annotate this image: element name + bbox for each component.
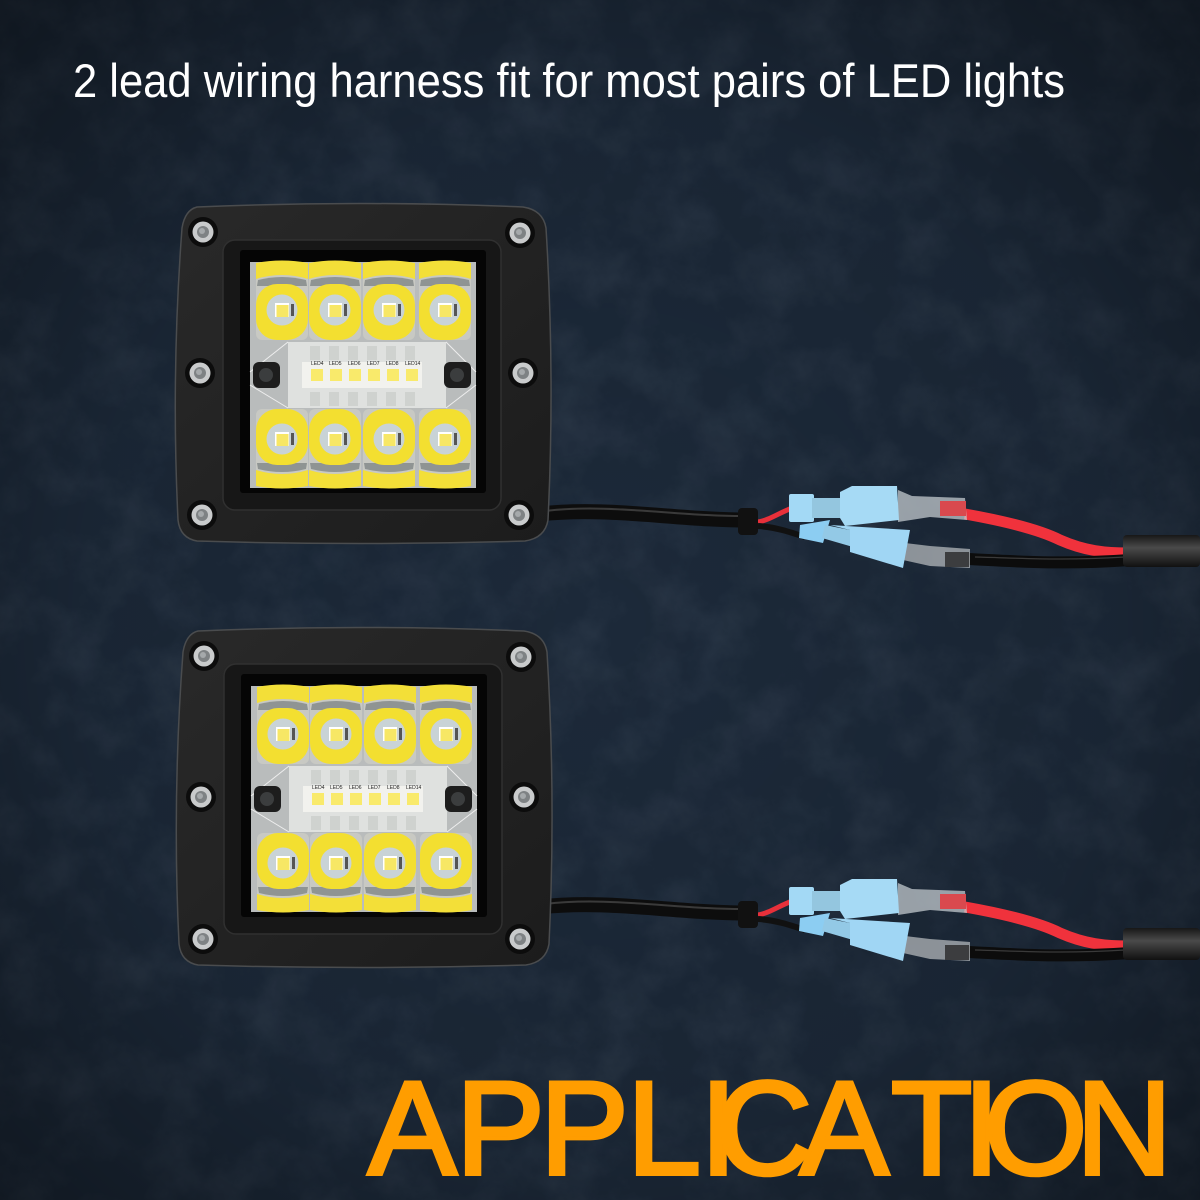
LED chip labels: top: LED5 — [329, 361, 342, 367]
title: 2 lead wiring harness fit for most pairs of LED lights — [73, 54, 1065, 107]
LED chip labels: bottom: LED4 — [312, 785, 325, 791]
LED chip labels: top: LED7 — [367, 361, 380, 367]
LED chip labels: bottom: LED6 — [349, 785, 362, 791]
LED chip labels: top: LED4 — [311, 361, 324, 367]
LED chip labels: top — [311, 361, 421, 367]
LED light: top — [175, 204, 551, 544]
LED light: bottom — [176, 628, 552, 968]
LED chip labels: bottom: LED8 — [387, 785, 400, 791]
LED chip labels: top: LED6 — [348, 361, 361, 367]
LED chip labels: top: LED8 — [386, 361, 399, 367]
wiring harness: top — [540, 486, 1200, 568]
LED chip labels: bottom — [312, 785, 422, 791]
LED chip labels: bottom: LED5 — [330, 785, 343, 791]
heading: APPLICATION: APPLICATION — [368, 1055, 1172, 1200]
LED chip labels: top: LED14 — [405, 361, 421, 367]
LED chip labels: bottom: LED7 — [368, 785, 381, 791]
wiring harness: bottom — [540, 879, 1200, 961]
LED chip labels: bottom: LED14 — [406, 785, 422, 791]
